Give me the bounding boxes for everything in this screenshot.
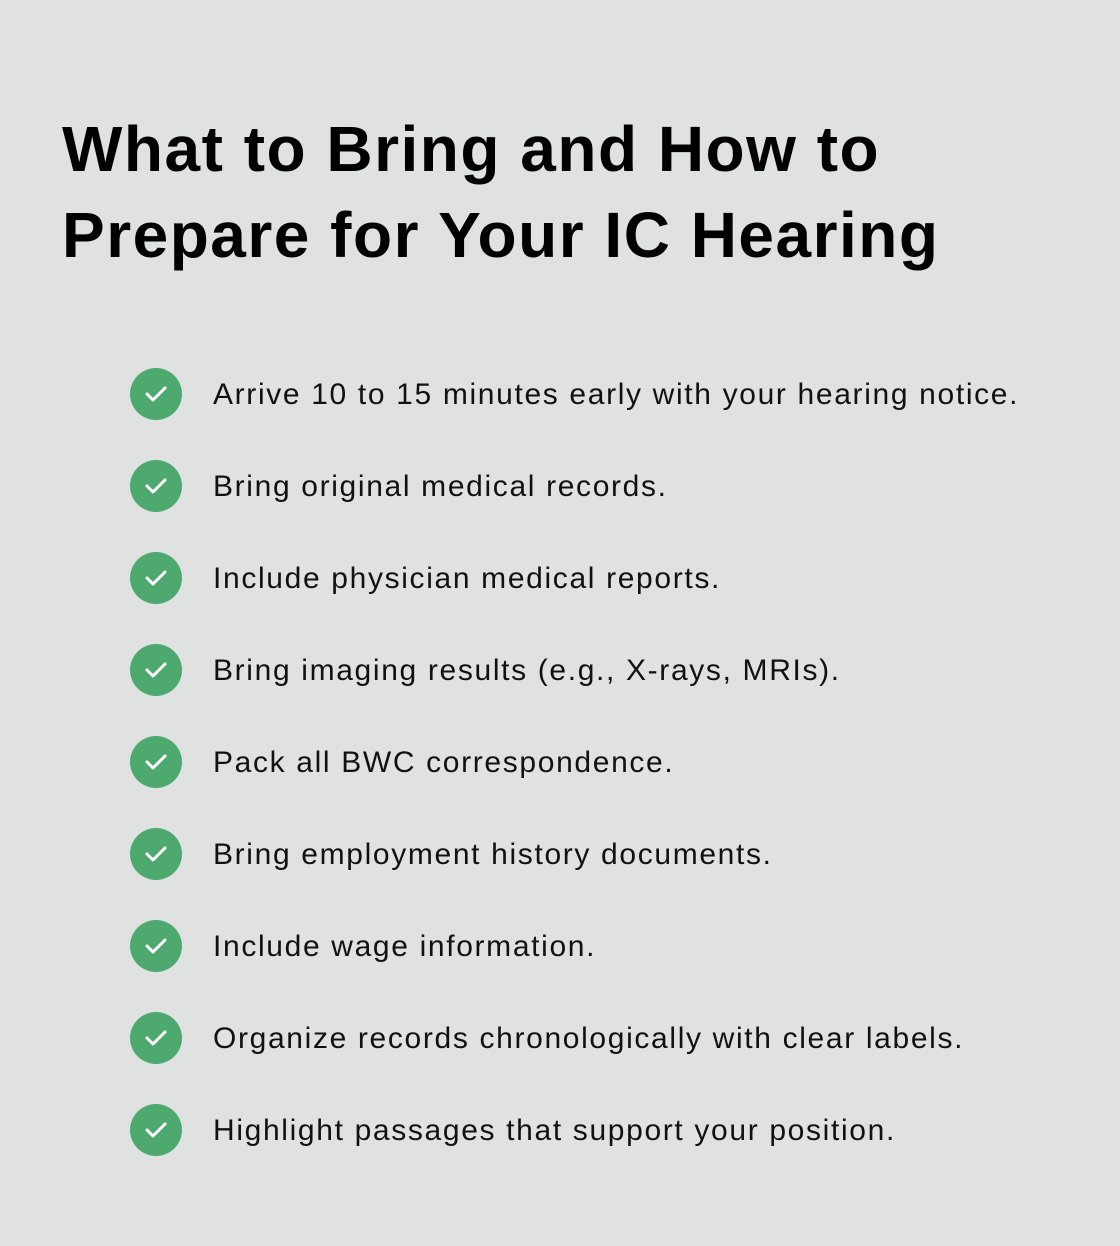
- checklist: [130, 368, 1019, 1156]
- item 5: Pack all BWC correspondence.: [213, 746, 674, 779]
- item 6: [130, 828, 773, 880]
- item 8: Organize records chronologically with clear labels.: [213, 1022, 964, 1055]
- item 2: Bring original medical records.: [213, 470, 668, 503]
- title: What to Bring and How to: [62, 113, 880, 185]
- item 4: [130, 644, 841, 696]
- item 1: [130, 368, 1019, 420]
- item 8: [130, 1012, 964, 1064]
- item 2: [130, 460, 668, 512]
- title: [62, 113, 939, 271]
- item 7: [130, 920, 596, 972]
- title: Prepare for Your IC Hearing: [62, 199, 939, 271]
- item 4: Bring imaging results (e.g., X-rays, MRIs).: [213, 654, 841, 687]
- item 1: Arrive 10 to 15 minutes early with your hearing notice.: [213, 378, 1019, 411]
- item 6: Bring employment history documents.: [213, 838, 773, 871]
- item 3: Include physician medical reports.: [213, 562, 721, 595]
- item 7: Include wage information.: [213, 930, 596, 963]
- item 9: Highlight passages that support your position.: [213, 1114, 896, 1147]
- item 5: [130, 736, 674, 788]
- item 3: [130, 552, 721, 604]
- item 9: [130, 1104, 896, 1156]
